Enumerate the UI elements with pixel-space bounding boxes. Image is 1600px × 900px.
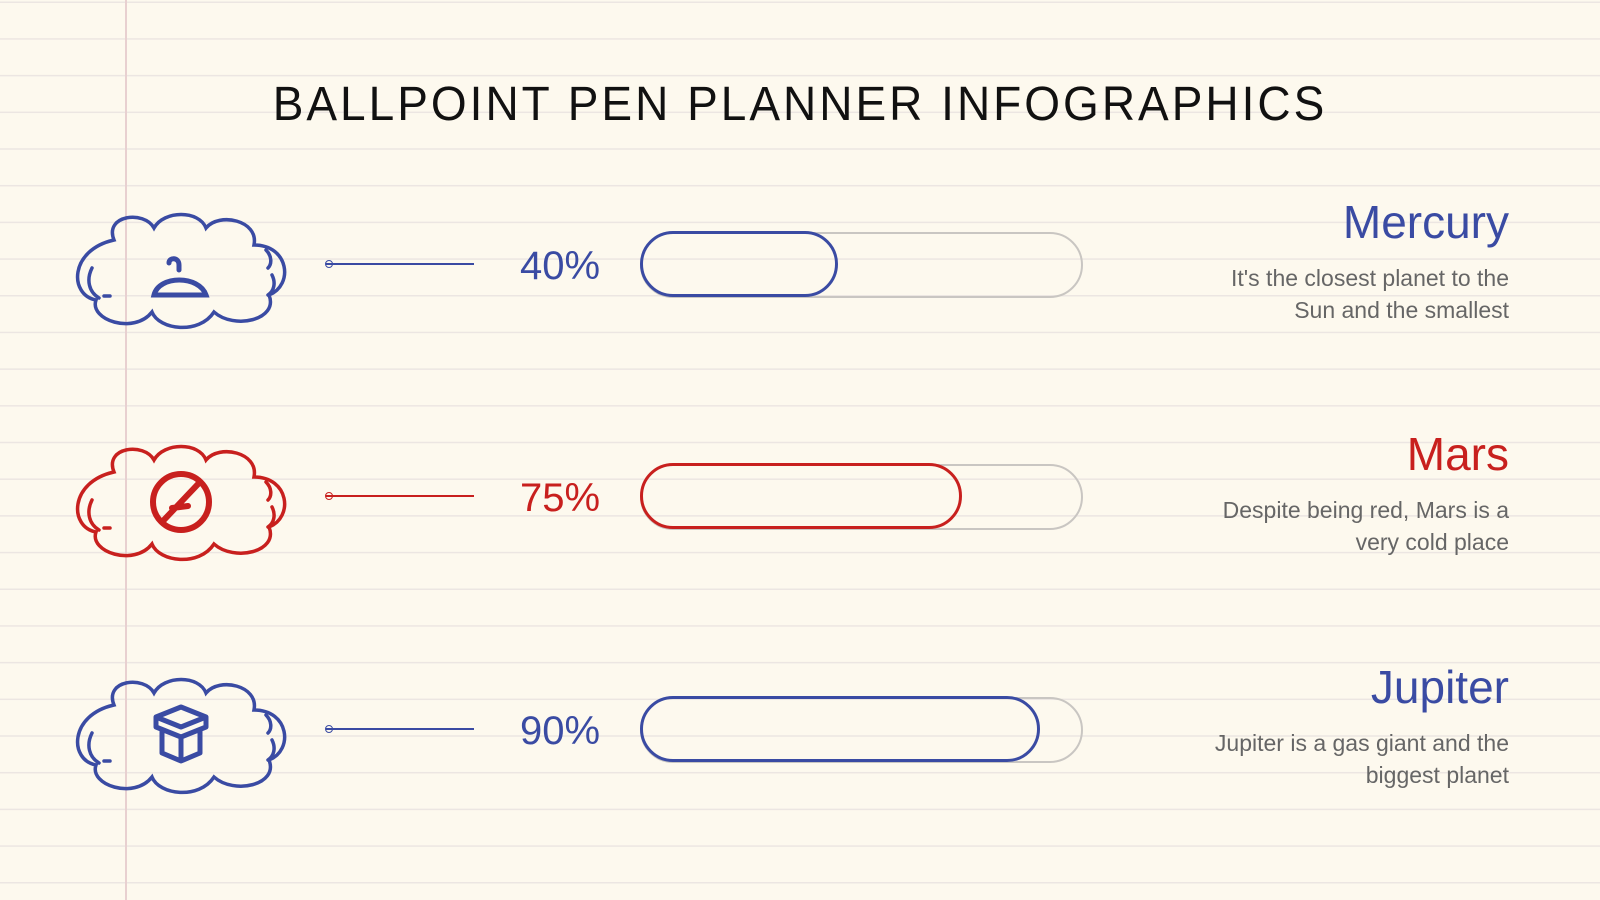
heading: Mercury [1343, 196, 1509, 248]
icon: cloud with no-sign [76, 444, 286, 562]
percent: 40% [520, 244, 600, 288]
progress bar [640, 697, 1083, 763]
row: Mercury [76, 196, 1509, 330]
description: Jupiter is a gas giant and the biggest planet [1215, 730, 1509, 788]
row: Jupiter [76, 661, 1509, 794]
progress bar [640, 464, 1083, 530]
percent: 75% [520, 476, 600, 520]
title: BALLPOINT PEN PLANNER INFOGRAPHICS [273, 76, 1327, 130]
progress bar [640, 232, 1083, 298]
heading: Jupiter [1371, 661, 1509, 713]
description: Despite being red, Mars is a very cold place [1223, 497, 1509, 555]
icon: cloud with box [76, 678, 286, 794]
row: Mars [76, 428, 1510, 562]
description: It's the closest planet to the Sun and the smallest [1231, 265, 1509, 323]
icon: cloud with hanger [76, 212, 286, 330]
heading: Mars [1407, 428, 1509, 480]
percent: 90% [520, 709, 600, 753]
